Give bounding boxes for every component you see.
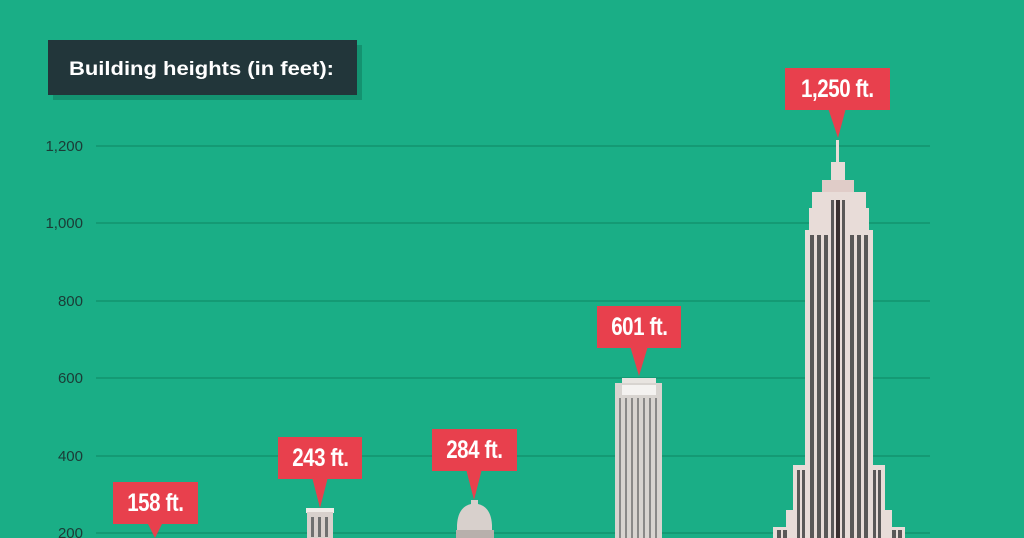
building: 601 ft tower	[615, 378, 662, 538]
title box	[48, 40, 362, 100]
building: empire state	[773, 140, 905, 538]
label 284	[432, 429, 517, 471]
pointers	[147, 108, 846, 538]
grid lines and axis labels: 400	[58, 448, 83, 465]
label 601	[597, 306, 681, 348]
grid lines and axis labels: 1,000	[45, 215, 83, 232]
grid lines and axis labels: 1,200	[45, 138, 83, 155]
label 158	[113, 482, 198, 524]
label 284: 284 ft.	[446, 436, 503, 464]
label 1250	[785, 68, 890, 110]
building: dome	[456, 500, 494, 538]
label 243	[278, 437, 362, 479]
title box: Building heights (in feet):	[69, 59, 334, 80]
label 601: 601 ft.	[611, 313, 667, 341]
label 158: 158 ft.	[127, 489, 184, 517]
grid lines and axis labels: 600	[58, 370, 83, 387]
label 1250: 1,250 ft.	[801, 75, 874, 103]
grid lines and axis labels: 800	[58, 293, 83, 310]
building: 243 ft	[306, 508, 334, 538]
grid lines and axis labels	[45, 138, 930, 538]
label 243: 243 ft.	[292, 444, 348, 472]
